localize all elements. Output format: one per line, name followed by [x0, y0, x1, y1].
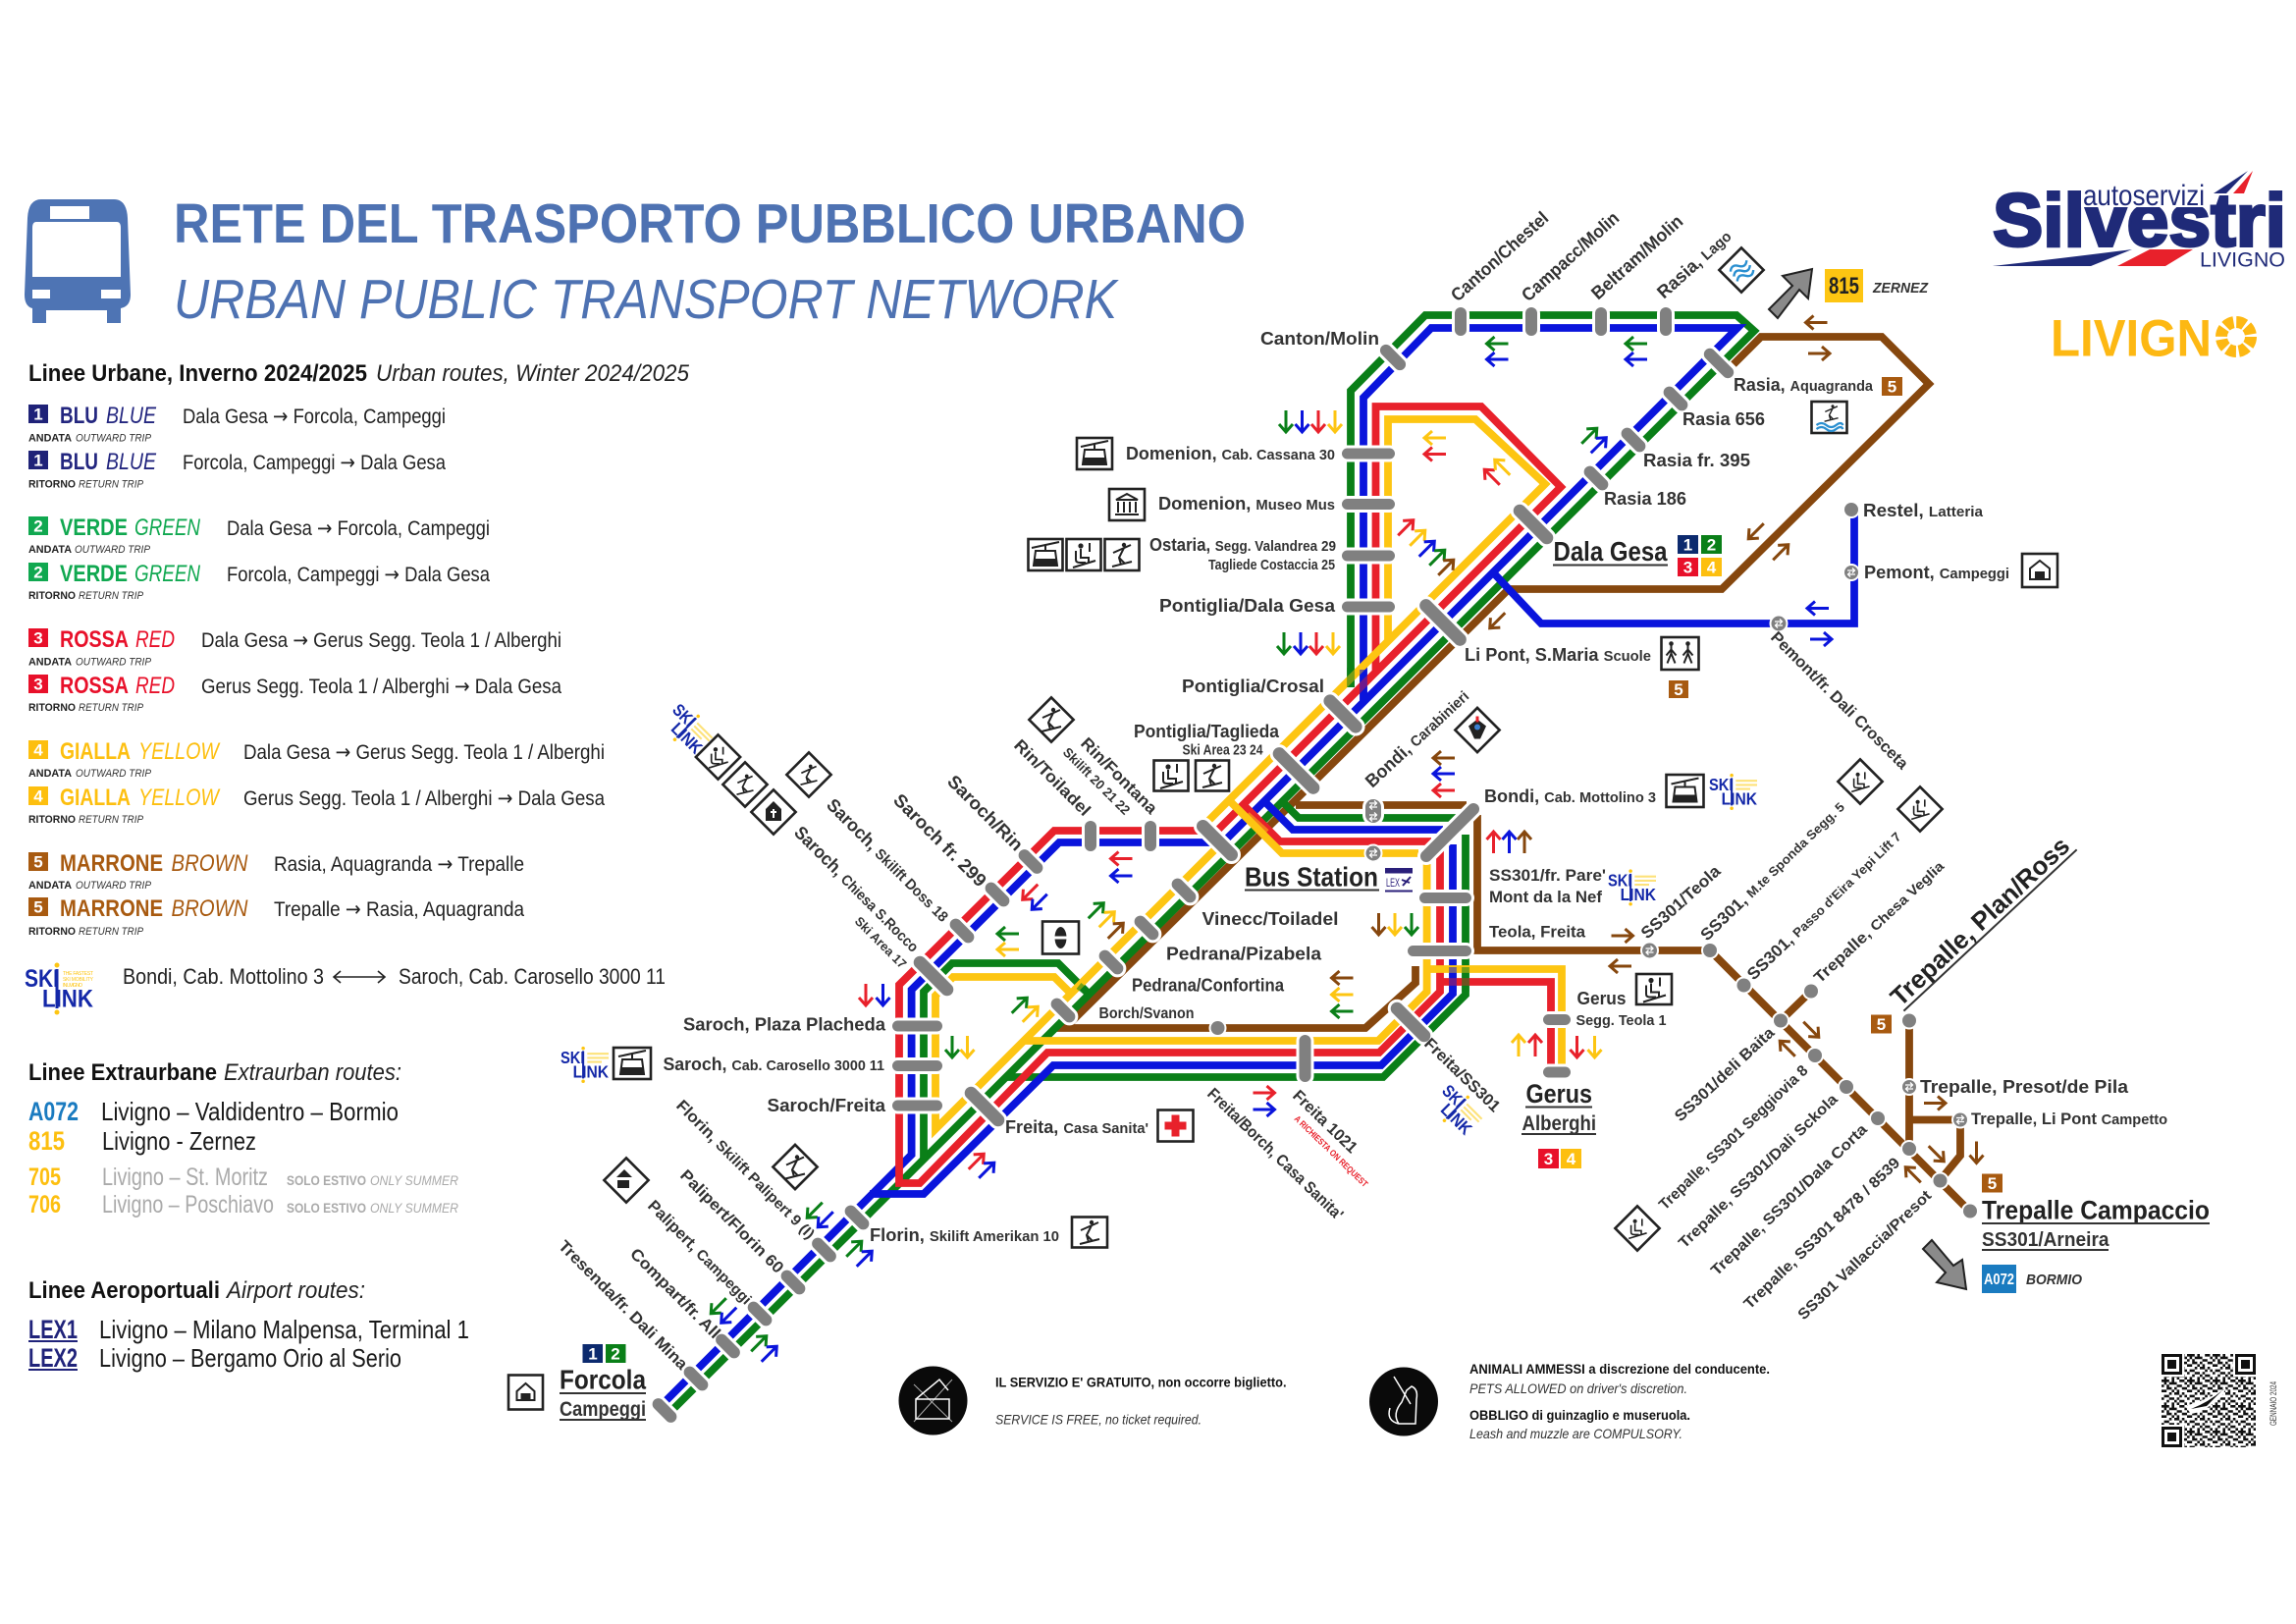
stop labels: west section: Saroch, Chiesa S.Rocco	[790, 822, 925, 955]
stop labels: west section	[555, 733, 1161, 1421]
stop labels: west section: Rin/Fontana	[1077, 733, 1161, 818]
stop labels: central section: Bondi, Carabinieri	[1361, 685, 1472, 791]
legend: yellow line: RETURN TRIP	[79, 814, 144, 826]
stop labels: Trepalle section: Trepalle, SS301/Dala Corta	[1708, 1121, 1871, 1279]
line badges: 2	[1707, 536, 1716, 554]
stop labels: north section: Rasia, Aquagranda	[1734, 374, 1874, 395]
stop labels: west section: Saroch, Skilift Doss 18	[823, 794, 954, 926]
legend: blue line: RETURN TRIP	[79, 479, 144, 491]
legend: yellow line: Dala Gesa → Gerus Segg. Teola 1 / Alberghi	[243, 740, 605, 764]
legend: extraurban routes: 815	[28, 1126, 65, 1156]
legend: extraurban routes: Livigno - Zernez	[102, 1126, 256, 1156]
legend: ski link shuttle: SKI	[25, 965, 59, 993]
legend: ski link shuttle: SKI MOBILITY	[63, 977, 94, 983]
legend: brown line: 5	[33, 852, 43, 872]
legend: green line: Dala Gesa → Forcola, Campeggi	[227, 516, 490, 540]
legend: yellow line: YELLOW	[138, 785, 221, 811]
stop labels: Trepalle section: Trepalle, Li Pont Campetto	[1971, 1110, 2167, 1128]
line badges: 5	[1674, 680, 1683, 699]
stop labels: central section: Pedrana/Pizabela	[1166, 943, 1322, 964]
stop labels: west section: Tresenda/fr. Dali Mina	[555, 1237, 691, 1374]
legend: yellow line: OUTWARD TRIP	[76, 768, 152, 780]
stop labels: west section: Skilift 20 21 22	[1060, 745, 1133, 818]
title	[174, 192, 1246, 331]
stop labels: Trepalle section: Trepalle Campaccio	[1982, 1196, 2210, 1225]
legend: brown line: OUTWARD TRIP	[76, 880, 152, 892]
network map lines	[666, 315, 1970, 1409]
legend: brown line: Trepalle → Rasia, Aquagranda	[274, 897, 524, 921]
legend: red line: Dala Gesa → Gerus Segg. Teola 1 / Alberghi	[201, 628, 561, 652]
legend: green line: RITORNO	[28, 590, 76, 602]
line badges: 1	[1683, 536, 1692, 554]
legend: brown line: Rasia, Aquagranda → Trepalle	[274, 852, 524, 876]
stop labels: central section: Alberghi	[1522, 1112, 1596, 1135]
stop labels: central section: Mont da la Nef	[1489, 888, 1602, 906]
legend: ski link shuttle: THE FASTEST	[63, 971, 93, 977]
legend: ski link shuttle: LINK	[42, 986, 93, 1013]
legend: blue line: Forcola, Campeggi → Dala Gesa	[183, 451, 446, 474]
legend: red line: Gerus Segg. Teola 1 / Alberghi → Dala Gesa	[201, 675, 561, 698]
stop labels: Trepalle section: SS301 Vallaccia/Presot	[1794, 1187, 1935, 1324]
icon: LEX bus station	[1385, 868, 1413, 892]
legend: extraurban routes: Livigno – St. Moritz	[102, 1164, 268, 1191]
stop labels: north section: Rasia fr. 395	[1643, 450, 1750, 470]
green line 2	[673, 315, 1754, 1409]
route badge: 815 Zernez	[1825, 269, 1929, 302]
line badges: 5	[1888, 377, 1896, 397]
blue line 1	[666, 328, 1854, 1401]
stop labels: central section: Gerus	[1576, 988, 1626, 1008]
legend: brown line: RITORNO	[28, 926, 76, 938]
line badges: 5	[1988, 1174, 1997, 1193]
legend: yellow line: GIALLA	[60, 785, 131, 811]
legend: airport routes: LEX1	[28, 1315, 78, 1344]
line badges: 4	[1707, 558, 1717, 577]
stop labels: central section: Gerus	[1525, 1079, 1592, 1109]
stop labels: north section: Pemont, Campeggi	[1864, 562, 2009, 582]
stop labels: Trepalle section: SS301/Arneira	[1982, 1229, 2109, 1251]
legend: brown line: BROWN	[171, 895, 248, 922]
legend: extraurban routes	[28, 1059, 458, 1218]
stop labels: central section: Teola, Freita	[1489, 923, 1586, 941]
legend heading: urban routes: Urban routes, Winter 2024/2025	[376, 360, 690, 387]
brown line 5	[1065, 337, 1970, 1212]
stop labels: north section: Pemont/fr. Dali Crosceta	[1767, 628, 1912, 774]
line badges: 2	[611, 1345, 620, 1363]
stop labels: Trepalle section: SS301/deli Baita	[1672, 1024, 1778, 1125]
stop labels: central section: Freita 1021	[1289, 1087, 1361, 1157]
logo: Silvestri: Silvestri	[1993, 179, 2286, 263]
legend: yellow line: YELLOW	[138, 738, 221, 765]
yellow line 4	[935, 419, 1562, 1129]
logo: Silvestri: autoservizi	[2083, 180, 2205, 212]
legend: red line: RED	[135, 626, 175, 653]
red line 3	[899, 406, 1561, 1183]
line badges: 3	[1683, 558, 1692, 577]
legend: extraurban routes: Extraurban routes:	[224, 1059, 401, 1086]
legend: green line: RETURN TRIP	[79, 590, 144, 602]
legend: brown line: MARRONE	[60, 895, 163, 922]
stop labels: north section: Restel, Latteria	[1863, 500, 1984, 520]
stop labels: west section: Palipert, Campeggi	[644, 1197, 755, 1308]
stop labels: Trepalle section: Trepalle, Plan/Ross	[1885, 831, 2075, 1011]
footer: pets note: Leash and muzzle are COMPULSORY.	[1469, 1426, 1682, 1441]
legend: extraurban routes: SOLO ESTIVO	[287, 1172, 366, 1188]
icon: ski link badges: SKI	[1608, 870, 1631, 891]
legend: extraurban routes: 706	[28, 1191, 61, 1218]
legend: extraurban routes: Livigno – Valdidentro – Bormio	[101, 1097, 399, 1126]
stop labels: west section: Saroch, Plaza Placheda	[683, 1013, 886, 1035]
footer: pets note: OBBLIGO di guinzaglio e museruola.	[1469, 1407, 1690, 1423]
legend: brown line: RETURN TRIP	[79, 926, 144, 938]
legend: blue line: ANDATA	[28, 432, 72, 444]
legend: extraurban routes: Linee Extraurbane	[28, 1059, 217, 1086]
legend: red line: ANDATA	[28, 656, 72, 668]
legend: red line: ROSSA	[60, 626, 129, 653]
stop labels: central section: Segg. Teola 1	[1576, 1012, 1667, 1029]
stop labels: west section: Palipert/Florin 60	[676, 1166, 787, 1277]
bus stops	[650, 307, 1977, 1425]
stop labels: west section: Florin, Skilift Amerikan 10	[870, 1224, 1059, 1245]
legend: red line: RITORNO	[28, 702, 76, 714]
direction arrows	[706, 316, 1983, 1367]
line badges: 4	[1567, 1150, 1576, 1168]
legend: blue line: 1	[33, 405, 43, 424]
icon: ski link badges: SKI	[561, 1048, 584, 1067]
icon: ski link badges: LINK	[1722, 788, 1757, 808]
legend: green line: VERDE	[60, 561, 128, 587]
stop labels: west section: Ski Area 17	[852, 914, 910, 971]
stop labels: north section: Tagliede Costaccia 25	[1208, 557, 1335, 573]
legend: blue line: 1	[33, 452, 43, 469]
footer: pets note: PETS ALLOWED on driver's discretion.	[1469, 1380, 1687, 1396]
line badges: 3	[1544, 1150, 1553, 1168]
arrow: to Zernez	[1769, 269, 1812, 318]
legend: extraurban routes: Livigno – Poschiavo	[102, 1191, 274, 1218]
legend: yellow line: 4	[33, 740, 43, 760]
legend: blue line: Dala Gesa → Forcola, Campeggi	[183, 405, 446, 428]
route badge: 815 Zernez: ZERNEZ	[1872, 280, 1929, 297]
footer: free service note: SERVICE IS FREE, no ticket required.	[995, 1412, 1201, 1428]
legend: green line: GREEN	[134, 514, 201, 541]
icons: stop services	[508, 247, 2057, 1410]
legend: extraurban routes: ONLY SUMMER	[370, 1172, 458, 1188]
legend: yellow line	[28, 738, 605, 826]
line badges: 5	[1877, 1015, 1886, 1034]
legend: brown line: BROWN	[171, 850, 248, 877]
icon: ski link badges: LINK	[1437, 1100, 1476, 1139]
legend: red line: RED	[135, 673, 175, 699]
legend: ski link shuttle	[25, 962, 666, 1015]
stop labels: Trepalle section: SS301/Teola	[1637, 861, 1725, 943]
logo: Livigno: LIVIGN	[2051, 310, 2212, 367]
legend: blue line: RITORNO	[28, 479, 76, 491]
stop labels: central section: SS301/fr. Pare'	[1489, 866, 1606, 885]
stop labels: west section: Forcola	[560, 1365, 646, 1394]
legend: yellow line: 4	[33, 787, 43, 805]
legend: ski link shuttle: IN LIVIGNO	[63, 983, 82, 989]
legend: yellow line: RITORNO	[28, 814, 76, 826]
stop labels: north section: Rasia 186	[1604, 488, 1686, 509]
stop labels: central section: Freita, Casa Sanita'	[1005, 1116, 1148, 1137]
legend: blue line	[28, 403, 446, 491]
stop labels: central section: Freita/Borch, Casa Sanita'	[1203, 1085, 1347, 1223]
stop labels: Trepalle section	[1637, 797, 2210, 1324]
stop labels: Trepalle section: Trepalle, SS301 8478 / 8539	[1740, 1155, 1904, 1313]
stop labels: north section: Domenion, Museo Mus	[1158, 493, 1335, 514]
stop labels: central section: Freita/SS301	[1420, 1035, 1504, 1115]
legend: green line: VERDE	[60, 514, 128, 541]
stop labels: north section: Dala Gesa	[1553, 536, 1668, 567]
stop labels: central section: Vinecc/Toiladel	[1201, 908, 1339, 929]
footer: free service note: IL SERVIZIO E' GRATUITO, non occorre biglietto.	[995, 1375, 1286, 1390]
line crossings	[1079, 668, 1466, 994]
stop labels: central section: Bus Station	[1245, 862, 1378, 892]
logo: Silvestri: LIVIGNO	[2200, 249, 2285, 271]
legend: extraurban routes: A072	[28, 1097, 79, 1126]
icon: bus	[25, 199, 131, 323]
stop labels: central section	[1005, 685, 1667, 1223]
stop labels: west section: Rin/Toiladel	[1010, 735, 1095, 820]
stop labels: central section: Ski Area 23 24	[1182, 742, 1263, 758]
legend: yellow line: Gerus Segg. Teola 1 / Alberghi → Dala Gesa	[243, 786, 605, 810]
stop labels: west section: Saroch fr. 299	[889, 789, 990, 891]
legend: airport routes: Livigno – Milano Malpensa, Terminal 1	[99, 1315, 469, 1344]
stop labels: north section: Pontiglia/Crosal	[1182, 676, 1324, 696]
stop labels: Trepalle section: Trepalle, SS301/Dali Sckola	[1676, 1091, 1842, 1252]
footer: pets note	[1369, 1361, 1770, 1441]
legend: green line: ANDATA	[28, 544, 72, 556]
print date: GENNAIO 2024	[2269, 1381, 2278, 1426]
legend: red line: OUTWARD TRIP	[76, 656, 152, 668]
stop labels: central section: Borch/Svanon	[1099, 1005, 1194, 1022]
stop labels: north section: Ostaria, Segg. Valandrea 29	[1149, 534, 1336, 555]
legend: ski link shuttle: Saroch, Cab. Carosello 3000 11	[399, 964, 666, 989]
legend: yellow line: ANDATA	[28, 768, 72, 780]
QR code	[2162, 1354, 2256, 1447]
stop labels: Trepalle section: Trepalle, Chesa Veglia	[1811, 858, 1948, 987]
legend heading: urban routes: Linee Urbane, Inverno 2024/2025	[28, 360, 367, 387]
stop labels: north section: Pontiglia/Dala Gesa	[1159, 595, 1336, 616]
icon: ski link badges	[561, 699, 1757, 1140]
footer: free service note	[899, 1367, 1286, 1435]
title: URBAN PUBLIC TRANSPORT NETWORK	[174, 268, 1120, 331]
legend: brown line: ANDATA	[28, 880, 72, 892]
route badge: A072 Bormio	[1982, 1265, 2082, 1293]
stop labels: north section: Rasia 656	[1682, 408, 1765, 429]
stop labels: north section: Domenion, Cab. Cassana 30	[1126, 443, 1335, 463]
route badge: A072 Bormio: A072	[1984, 1272, 2014, 1288]
icon: ski link badges: LINK	[573, 1061, 609, 1081]
stop labels: west section: Saroch/Freita	[768, 1095, 886, 1115]
stop labels: north section: Canton/Chestel	[1447, 207, 1552, 305]
legend: blue line: OUTWARD TRIP	[76, 432, 152, 444]
stop labels: central section: A RICHIESTA ON REQUEST	[1293, 1113, 1370, 1189]
legend: extraurban routes: ONLY SUMMER	[370, 1200, 458, 1216]
legend: airport routes	[28, 1277, 469, 1373]
stop labels: west section: Saroch, Cab. Carosello 3000 11	[664, 1054, 884, 1074]
stop labels: central section: Pontiglia/Taglieda	[1134, 721, 1280, 741]
legend heading: urban routes	[28, 360, 690, 387]
stop labels: Trepalle section: Trepalle, Presot/de Pila	[1920, 1076, 2129, 1097]
legend: green line	[28, 514, 490, 602]
stop labels: north section: Campacc/Molin	[1518, 207, 1623, 305]
legend: airport routes: Linee Aeroportuali	[28, 1277, 220, 1304]
stop labels: west section: Florin, Skilift Palipert 9 (I)	[672, 1097, 819, 1243]
icon: ski link badges: LINK	[1621, 885, 1656, 904]
stop labels: Trepalle section: SS301, M.te Sponda Segg. 5	[1697, 797, 1848, 945]
legend: brown line	[28, 850, 524, 938]
stop labels: Trepalle section: SS301, Passo d'Eira Yepi Lift 7	[1743, 827, 1904, 984]
legend: red line: RETURN TRIP	[79, 702, 144, 714]
stop labels: north section: Rasia, Lago	[1653, 225, 1735, 302]
legend: blue line: BLUE	[106, 403, 157, 429]
legend: brown line: MARRONE	[60, 850, 163, 877]
title: RETE DEL TRASPORTO PUBBLICO URBANO	[174, 192, 1246, 255]
footer: pets note: ANIMALI AMMESSI a discrezione del conducente.	[1469, 1361, 1770, 1377]
stop labels: north section: Li Pont, S.Maria Scuole	[1465, 644, 1651, 665]
line badges	[583, 377, 2002, 1363]
legend: airport routes: Livigno – Bergamo Orio al Serio	[99, 1343, 401, 1373]
stop labels: north section: Beltram/Molin	[1587, 210, 1686, 303]
legend: brown line: 5	[33, 897, 43, 917]
legend: yellow line: GIALLA	[60, 738, 131, 765]
icon: ski link badges: SKI	[668, 700, 700, 731]
icon: ski link badges: SKI	[1709, 775, 1733, 794]
legend: red line	[28, 626, 561, 714]
stop labels: west section: Campeggi	[560, 1398, 646, 1421]
arrow: to Bormio	[1923, 1240, 1966, 1289]
legend: ski link shuttle: Bondi, Cab. Mottolino 3	[123, 964, 324, 989]
legend: extraurban routes: 705	[28, 1164, 61, 1191]
route badge: A072 Bormio: BORMIO	[2026, 1272, 2082, 1288]
legend: red line: 3	[33, 628, 43, 648]
stop labels: north section	[1126, 207, 2009, 774]
legend: green line: GREEN	[134, 561, 201, 587]
legend: red line: 3	[33, 676, 43, 693]
legend: blue line: BLU	[60, 449, 98, 475]
legend: green line: 2	[33, 516, 43, 536]
stop labels: Trepalle section: Trepalle, SS301 Seggiovia 8	[1656, 1062, 1812, 1214]
legend: airport routes: Airport routes:	[225, 1277, 365, 1304]
line badges: 1	[588, 1345, 598, 1363]
legend: red line: ROSSA	[60, 673, 129, 699]
stop labels: west section: Compart/fr. All	[626, 1245, 723, 1342]
legend: green line: OUTWARD TRIP	[75, 544, 151, 556]
legend: green line: Forcola, Campeggi → Dala Gesa	[227, 563, 490, 586]
stop labels: north section: Canton/Molin	[1260, 328, 1379, 349]
stop labels: central section: Pedrana/Confortina	[1132, 974, 1285, 996]
icon: LEX bus station: LEX	[1386, 876, 1400, 890]
legend: blue line: BLUE	[106, 449, 157, 475]
route badge: 815 Zernez: 815	[1829, 273, 1859, 299]
legend: blue line: BLU	[60, 403, 98, 429]
stop labels: central section: Bondi, Cab. Mottolino 3	[1484, 785, 1656, 806]
legend: green line: 2	[33, 564, 43, 581]
icon: ski link badges: LINK	[667, 719, 707, 758]
legend: extraurban routes: SOLO ESTIVO	[287, 1200, 366, 1216]
icon: ski link badges: SKI	[1438, 1081, 1469, 1111]
legend: airport routes: LEX2	[28, 1343, 78, 1373]
stop labels: west section: Saroch/Rin	[943, 771, 1028, 855]
